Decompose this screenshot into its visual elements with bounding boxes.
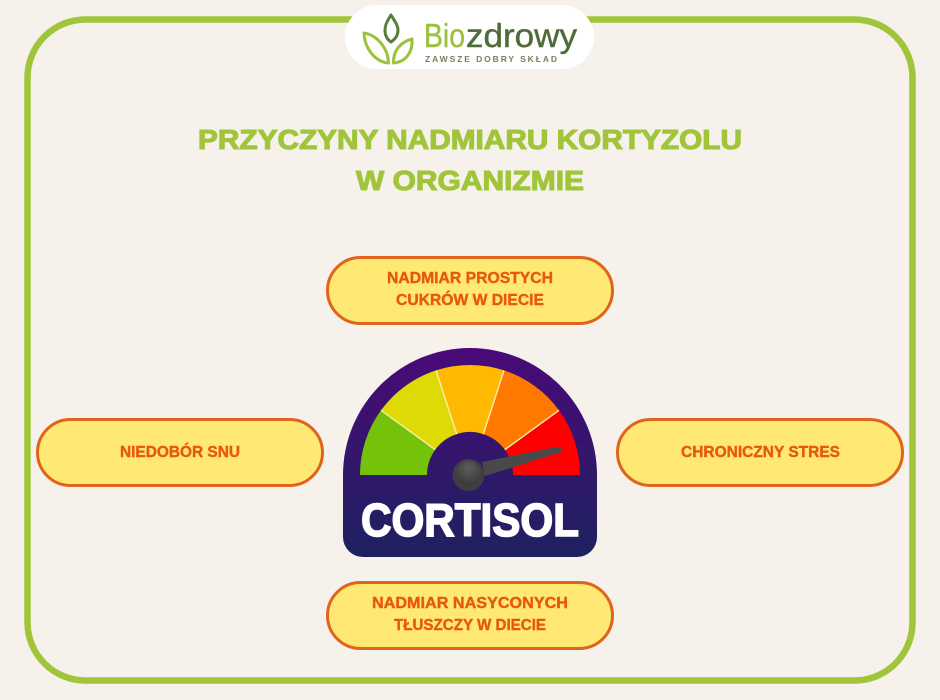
gauge segments (360, 365, 580, 475)
callout: chronic stress (618, 420, 902, 486)
callout: chronic stress: CHRONICZNY STRES (681, 444, 840, 461)
logo wordmark: Bio (424, 17, 465, 54)
callout: simple sugars: CUKRÓW W DIECIE (396, 291, 544, 309)
callout: simple sugars (328, 258, 612, 324)
gauge label: CORTISOL (361, 494, 579, 546)
callout: saturated fats: NADMIAR NASYCONYCH (372, 595, 568, 612)
logo wordmark: zdrowy (466, 17, 578, 54)
logo background pill (345, 5, 594, 69)
gauge needle (452, 446, 562, 491)
callout: saturated fats (328, 582, 612, 648)
logo tagline: ZAWSZE DOBRY SKŁAD (425, 54, 557, 64)
title: W ORGANIZMIE (356, 165, 584, 196)
logo: Biozdrowy (345, 5, 594, 69)
title (198, 124, 742, 196)
callout: simple sugars: NADMIAR PROSTYCH (387, 270, 553, 287)
cortisol gauge (343, 348, 597, 557)
callout: saturated fats: TŁUSZCZY W DIECIE (394, 617, 546, 634)
title: PRZYCZYNY NADMIARU KORTYZOLU (198, 124, 742, 155)
callout: sleep deficit (38, 420, 322, 486)
callout: sleep deficit: NIEDOBÓR SNU (120, 443, 240, 461)
gauge body (343, 348, 597, 557)
icon: three leaves (364, 15, 412, 63)
